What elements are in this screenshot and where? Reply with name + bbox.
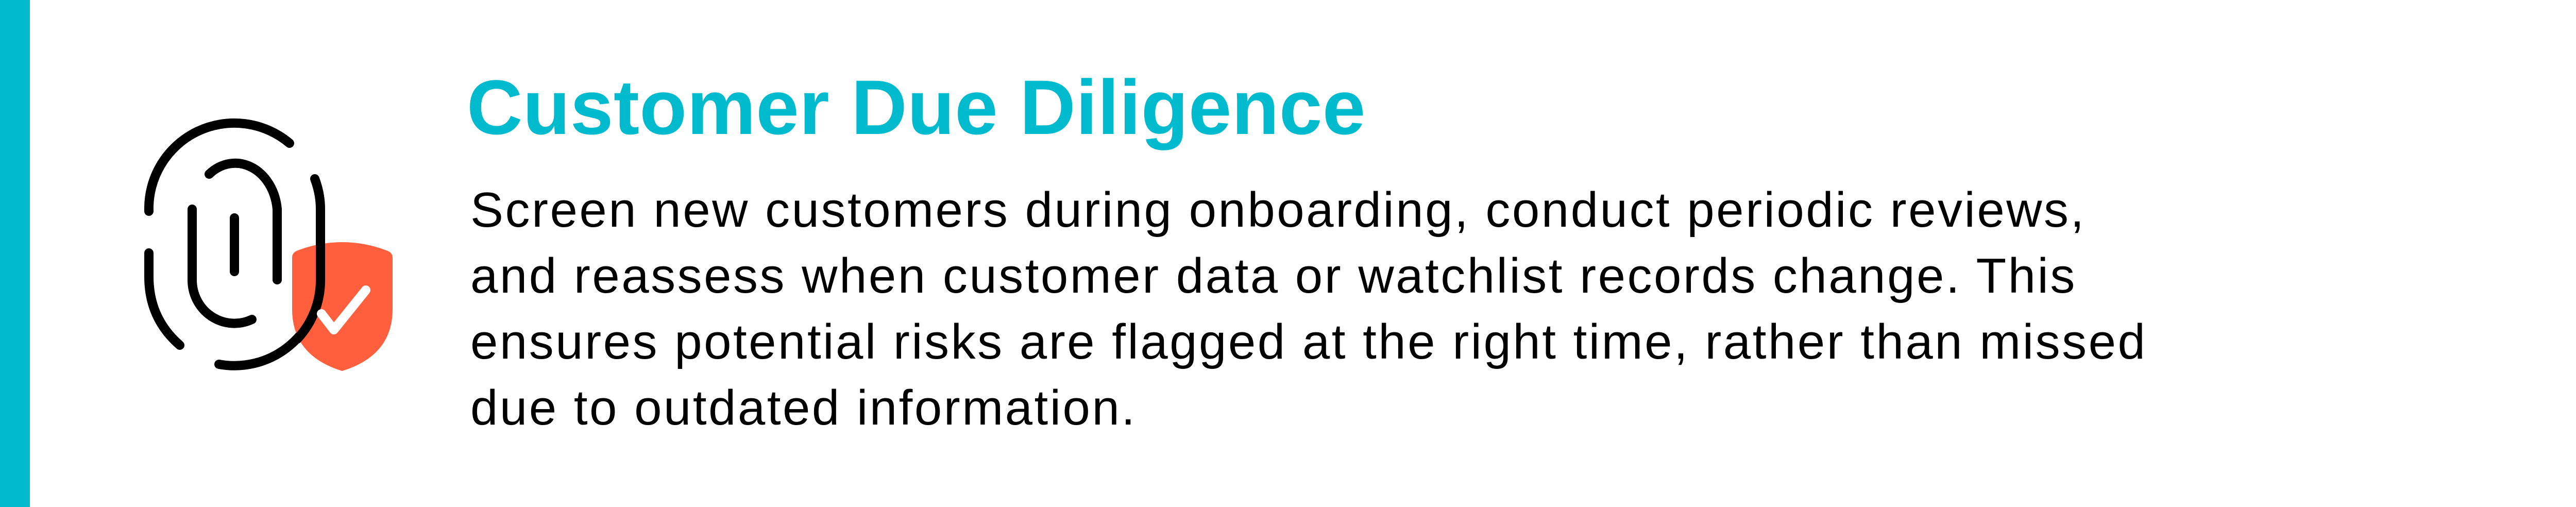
shield bbox=[292, 209, 393, 371]
body text bbox=[470, 182, 2147, 435]
title: Customer Due Diligence bbox=[467, 64, 1366, 150]
accent bar bbox=[0, 0, 30, 507]
body text: ensures potential risks are flagged at the right time, rather than missed bbox=[470, 314, 2147, 369]
body text: and reassess when customer data or watchlist records change. This bbox=[470, 248, 2077, 303]
body text: due to outdated information. bbox=[470, 380, 1137, 435]
icon: fingerprint with shield bbox=[144, 119, 393, 371]
body text: Screen new customers during onboarding, conduct periodic reviews, bbox=[470, 182, 2086, 238]
